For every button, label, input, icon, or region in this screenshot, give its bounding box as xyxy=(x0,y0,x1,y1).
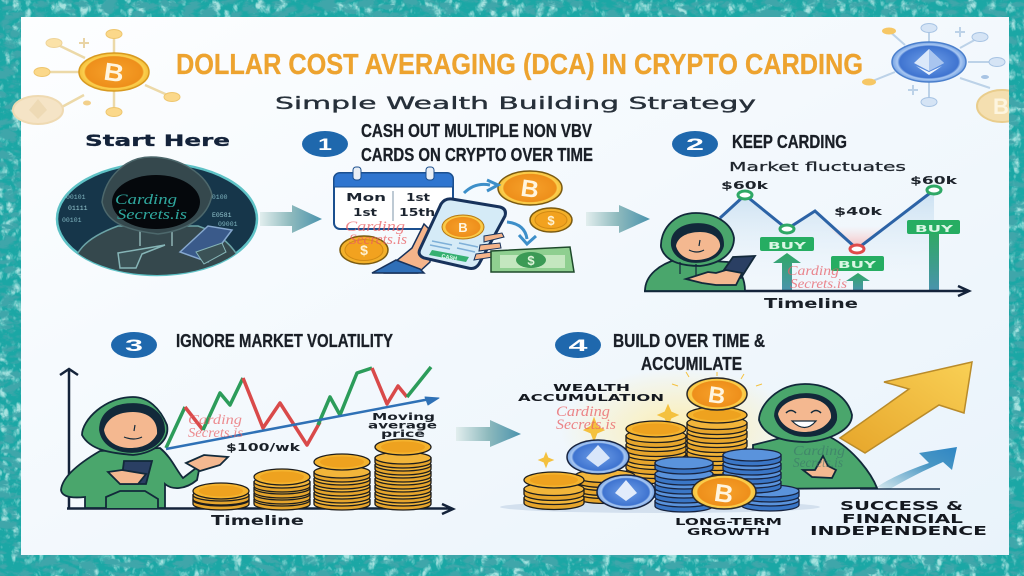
badge 2: 2 xyxy=(686,135,704,154)
label: wealth accumulation: ACCUMULATION xyxy=(518,393,664,404)
sparkles xyxy=(539,372,762,467)
badge 2 xyxy=(672,131,718,157)
watermark: Secrets.is xyxy=(556,417,616,433)
arrow xyxy=(260,205,322,233)
label: moving average: price xyxy=(381,429,425,440)
line chart: BUY xyxy=(768,241,807,252)
line chart: BUY xyxy=(838,260,877,271)
bitcoin coin front: B xyxy=(712,479,735,509)
heading: KEEP CARDING xyxy=(732,132,847,152)
icon: small coin xyxy=(530,208,572,232)
watermark: Secrets.is xyxy=(188,426,244,441)
heading xyxy=(613,331,765,374)
label: moving average: Moving xyxy=(372,412,435,423)
illustration: hooded figure: 01111 xyxy=(68,205,88,212)
bitcoin coin top: B xyxy=(707,381,727,409)
heading: start here: Start Here xyxy=(85,131,230,150)
watermark xyxy=(556,404,616,433)
watermark: Carding xyxy=(787,264,839,279)
watermark: Carding xyxy=(556,404,611,420)
illustration: hooded figure: 00101 xyxy=(62,217,82,224)
coin stack 1 xyxy=(193,483,249,510)
label: wealth accumulation xyxy=(518,383,664,404)
label: long-term growth: LONG-TERM xyxy=(675,517,782,528)
coin stack 3 xyxy=(314,454,370,510)
watermark xyxy=(345,219,407,248)
watermark: Carding xyxy=(188,413,242,428)
blue stack left xyxy=(655,457,713,512)
panel: step 4 xyxy=(500,331,987,538)
ethereum coin lower xyxy=(597,475,655,509)
ethereum coin upper xyxy=(567,440,629,474)
watermark xyxy=(188,413,244,441)
badge 4 xyxy=(555,332,601,358)
watermark xyxy=(793,444,845,471)
gold stack right xyxy=(687,407,747,480)
label: moving average xyxy=(368,412,437,440)
panel: header xyxy=(13,24,1024,124)
illustration: hooded figure: Secrets.is xyxy=(117,207,187,223)
gold growth arrow xyxy=(840,362,972,453)
title: DOLLAR COST AVERAGING (DCA) IN CRYPTO CARDING xyxy=(176,49,863,81)
watermark: Carding xyxy=(793,444,845,459)
icon: ethereum network: B xyxy=(993,94,1009,119)
axes xyxy=(60,369,453,514)
label: success: INDEPENDENCE xyxy=(810,524,987,538)
illustration: hooded figure: 00100 xyxy=(208,194,228,201)
subtitle: Simple Wealth Building Strategy xyxy=(275,94,756,114)
gold stack middle xyxy=(626,421,686,484)
base line xyxy=(860,488,940,490)
heading: CARDS ON CRYPTO OVER TIME xyxy=(361,145,593,165)
label: long-term growth: GROWTH xyxy=(687,527,770,538)
icon: bitcoin coin xyxy=(498,171,562,205)
icon: ethereum network xyxy=(862,24,1024,122)
icon: curved arrows xyxy=(464,180,536,244)
panel: step 3 xyxy=(60,331,521,529)
ground shadow xyxy=(500,501,820,513)
price line chart xyxy=(166,367,439,449)
icon: calendar: 1st xyxy=(353,207,377,219)
watermark: Carding xyxy=(115,192,178,208)
badge 3 xyxy=(111,332,157,358)
character: green hoodie with phone xyxy=(645,213,755,291)
arrow xyxy=(456,420,521,447)
badge 3: 3 xyxy=(125,336,143,355)
axis label: Timeline xyxy=(211,514,304,529)
icon: sleeve xyxy=(372,260,424,273)
label: weekly amount: $100/wk xyxy=(226,442,302,454)
watermark: Carding xyxy=(345,219,406,235)
watermark xyxy=(787,264,848,292)
gold stack back xyxy=(575,470,635,504)
illustration: hooded figure: 00101 xyxy=(66,194,86,201)
label: wealth accumulation: WEALTH xyxy=(553,383,630,394)
coin stack 4 xyxy=(375,439,431,510)
line chart xyxy=(644,174,969,296)
label: moving average: average xyxy=(368,420,437,432)
icon: fingers xyxy=(474,233,504,260)
glow xyxy=(560,368,800,492)
badge 1 xyxy=(302,131,348,157)
watermark: Secrets.is xyxy=(793,456,844,471)
line chart: $40k xyxy=(834,205,883,218)
icon: calendar xyxy=(334,167,453,229)
icon: banknote xyxy=(491,247,574,272)
icon: hand xyxy=(385,224,432,273)
label: success: SUCCESS & xyxy=(840,499,963,513)
line chart: $60k xyxy=(721,179,769,192)
heading: IGNORE MARKET VOLATILITY xyxy=(176,331,393,351)
arrow xyxy=(586,205,650,233)
icon: calendar: 1st xyxy=(406,192,430,204)
axis label: Timeline xyxy=(764,297,858,312)
icon: dollar coin: $ xyxy=(360,242,368,258)
watermark: Secrets.is xyxy=(349,232,407,248)
icon: calendar: 15th xyxy=(399,207,435,219)
bitcoin coin top xyxy=(687,378,747,410)
heading: CASH OUT MULTIPLE NON VBV xyxy=(361,121,592,141)
icon: calendar: Mon xyxy=(346,192,386,204)
watermark: Secrets.is xyxy=(790,277,848,292)
badge 1: 1 xyxy=(318,135,332,154)
bitcoin coin front xyxy=(692,475,756,509)
icon: phone xyxy=(419,199,505,268)
icon: bitcoin network: B xyxy=(102,58,126,88)
panel: step 2 xyxy=(644,131,969,312)
heading xyxy=(361,121,593,165)
line chart: BUY xyxy=(915,224,954,235)
label: success: FINANCIAL xyxy=(842,512,964,526)
character: happy hoodie xyxy=(753,384,877,489)
label: success xyxy=(810,499,987,538)
line chart: $60k xyxy=(910,174,958,187)
coin stack 2 xyxy=(254,469,310,510)
panel: start here xyxy=(57,131,322,280)
badge 4: 4 xyxy=(568,336,589,355)
icon: dollar coin xyxy=(340,236,388,264)
panel: step 1 xyxy=(302,121,650,273)
icon: bitcoin network xyxy=(13,30,180,124)
icon: phone: B xyxy=(458,220,468,235)
icon: bitcoin coin: B xyxy=(519,175,541,204)
character: hoodie gesturing xyxy=(61,397,228,508)
blue stack right xyxy=(723,449,799,511)
icon: banknote: $ xyxy=(527,253,535,268)
heading: BUILD OVER TIME & xyxy=(613,331,765,351)
illustration: hooded figure: 09001 xyxy=(218,221,238,228)
illustration: hooded figure: E0581 xyxy=(212,212,232,219)
heading: ACCUMILATE xyxy=(641,354,742,374)
gold stack left xyxy=(524,472,584,510)
label: long-term growth xyxy=(675,517,782,538)
blue growth arrow xyxy=(877,447,957,489)
illustration: hooded figure xyxy=(57,157,257,280)
chart subtitle: Market fluctuates xyxy=(729,160,906,174)
icon: phone: CASH xyxy=(441,254,457,262)
icon: small coin: $ xyxy=(547,213,555,228)
